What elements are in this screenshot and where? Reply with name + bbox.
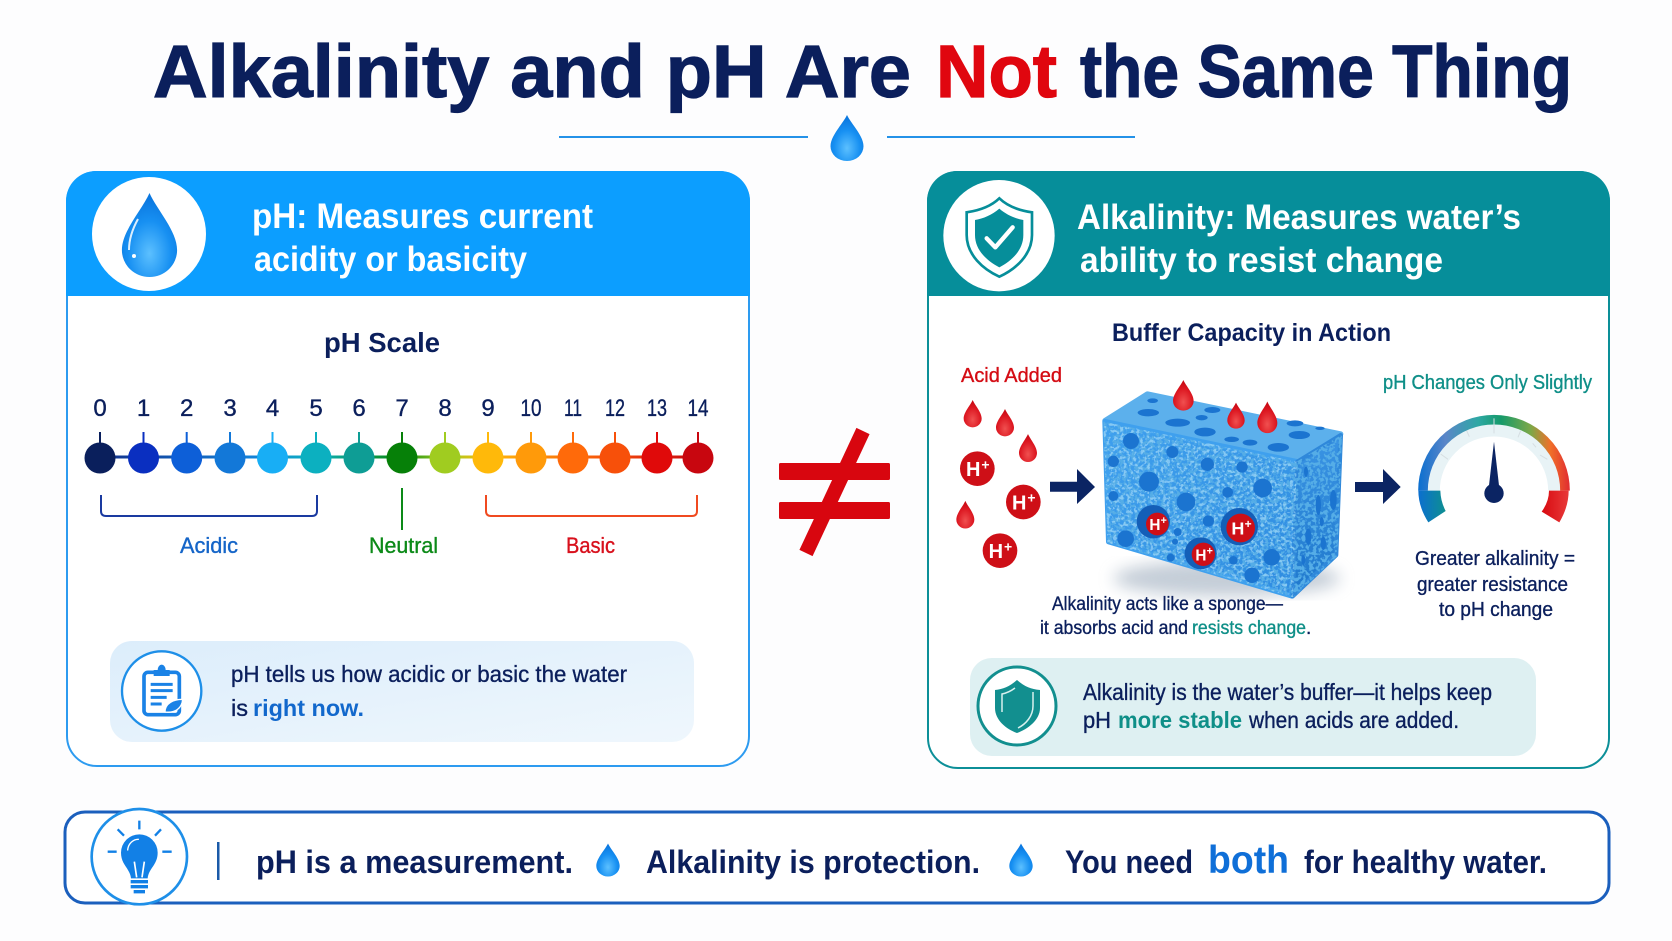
pH scale heading: pH Scale <box>324 327 440 358</box>
scale numbers: 0 <box>93 395 107 422</box>
callout text <box>231 661 627 721</box>
acid drops on sponge <box>1173 380 1277 433</box>
gauge caption <box>1415 548 1575 621</box>
panel: pH <box>66 171 750 766</box>
sponge illustration <box>1103 380 1342 597</box>
callout: pH right now <box>110 641 694 742</box>
arrow: acid to sponge <box>1050 469 1095 504</box>
buffer callout text: Alkalinity is the water’s buffer—it helps keep <box>1083 679 1492 705</box>
takeaway text: You need <box>1065 844 1193 880</box>
takeaway text: for healthy water. <box>1304 844 1547 880</box>
title <box>153 30 1572 113</box>
sponge caption <box>1040 594 1311 639</box>
takeaway text: pH is a measurement. <box>256 844 573 880</box>
acid drops and hydrogen ions: H <box>1012 492 1026 514</box>
buffer callout text: pH <box>1083 707 1111 733</box>
scale dots <box>84 432 714 474</box>
hydrogen ions in sponge: H <box>1231 519 1244 539</box>
scale numbers: 7 <box>395 395 409 422</box>
basic bracket <box>486 495 697 516</box>
takeaway text: both <box>1208 839 1289 882</box>
pH panel heading <box>252 197 593 279</box>
acid drops and hydrogen ions: + <box>1027 490 1036 506</box>
acid added label: Acid Added <box>961 365 1062 387</box>
ph changes label: pH Changes Only Slightly <box>1383 372 1592 394</box>
basic label: Basic <box>566 533 615 558</box>
hydrogen ions in sponge: H <box>1149 517 1160 534</box>
title: Alkalinity and pH Are <box>153 30 911 113</box>
scale numbers: 8 <box>438 395 452 422</box>
pH panel heading: pH: Measures current <box>252 197 593 236</box>
scale numbers: 6 <box>352 395 366 422</box>
icon: not-equal sign <box>779 431 890 553</box>
pH panel heading: acidity or basicity <box>254 240 527 279</box>
scale numbers: 4 <box>266 395 279 422</box>
scale numbers: 5 <box>309 395 323 422</box>
gauge caption: greater resistance <box>1417 574 1568 596</box>
scale numbers: 13 <box>647 395 667 422</box>
scale numbers: 9 <box>481 395 495 422</box>
buffer callout text: more stable <box>1118 707 1242 733</box>
takeaway text: Alkalinity is protection. <box>646 844 980 880</box>
gauge caption: Greater alkalinity = <box>1415 548 1575 570</box>
buffer capacity heading: Buffer Capacity in Action <box>1112 319 1391 347</box>
title: Not <box>936 30 1057 113</box>
scale numbers: 12 <box>605 395 625 422</box>
title: the Same Thing <box>1080 30 1572 113</box>
title divider with water drop <box>559 115 1135 161</box>
bottom takeaway bar <box>65 809 1609 904</box>
sponge caption: resists change <box>1192 618 1306 639</box>
scale numbers <box>93 395 708 422</box>
alkalinity panel header band <box>927 171 1610 296</box>
icon: clipboard <box>122 651 201 731</box>
takeaway text <box>256 839 1547 882</box>
callout text: pH tells us how acidic or basic the water <box>231 661 627 687</box>
neutral marker <box>401 488 403 530</box>
callout: alkalinity buffer <box>970 658 1536 756</box>
hydrogen ions in sponge <box>1146 513 1255 566</box>
icon: small drops <box>596 844 1033 876</box>
scale numbers: 2 <box>180 395 193 422</box>
pH scale chart <box>84 395 714 558</box>
icon: light bulb <box>92 809 187 904</box>
scale numbers: 14 <box>688 395 708 422</box>
acid drops and hydrogen ions: H <box>989 541 1003 563</box>
callout text: right now. <box>253 695 364 721</box>
hydrogen ions in sponge: + <box>1245 517 1252 531</box>
sponge caption: . <box>1306 618 1311 639</box>
pH panel header band <box>66 171 750 296</box>
arrow: sponge to gauge <box>1355 469 1401 504</box>
buffer callout text <box>1083 679 1492 733</box>
hydrogen ions in sponge: + <box>1207 545 1213 557</box>
hydrogen ions in sponge: H <box>1195 547 1206 564</box>
icon: water drop in white circle <box>92 177 206 291</box>
acidic label: Acidic <box>180 533 238 558</box>
buffer callout text: when acids are added. <box>1248 707 1459 733</box>
sponge caption: it absorbs acid and <box>1040 618 1188 639</box>
acid drops and hydrogen ions <box>956 400 1041 568</box>
hydrogen ions in sponge: + <box>1161 515 1167 527</box>
gauge <box>1418 418 1569 522</box>
icon: solid shield <box>978 667 1056 745</box>
icon: shield with check <box>943 180 1055 291</box>
alkalinity panel heading: ability to resist change <box>1080 241 1443 280</box>
acid drops and hydrogen ions: + <box>981 456 990 472</box>
sponge caption: Alkalinity acts like a sponge— <box>1052 594 1283 615</box>
neutral label: Neutral <box>369 533 438 558</box>
acid drops and hydrogen ions: + <box>1004 538 1012 554</box>
scale numbers: 11 <box>564 395 582 422</box>
acidic bracket <box>101 495 317 516</box>
callout text: is <box>231 695 248 721</box>
scale numbers: 3 <box>223 395 237 422</box>
gauge caption: to pH change <box>1439 599 1553 621</box>
sponge pores <box>1108 398 1337 583</box>
alkalinity panel heading <box>1077 198 1521 280</box>
panel: alkalinity <box>927 171 1610 768</box>
alkalinity panel heading: Alkalinity: Measures water’s <box>1077 198 1521 237</box>
scale numbers: 1 <box>137 395 150 422</box>
scale numbers: 10 <box>520 395 542 422</box>
acid drops and hydrogen ions: H <box>966 459 980 481</box>
